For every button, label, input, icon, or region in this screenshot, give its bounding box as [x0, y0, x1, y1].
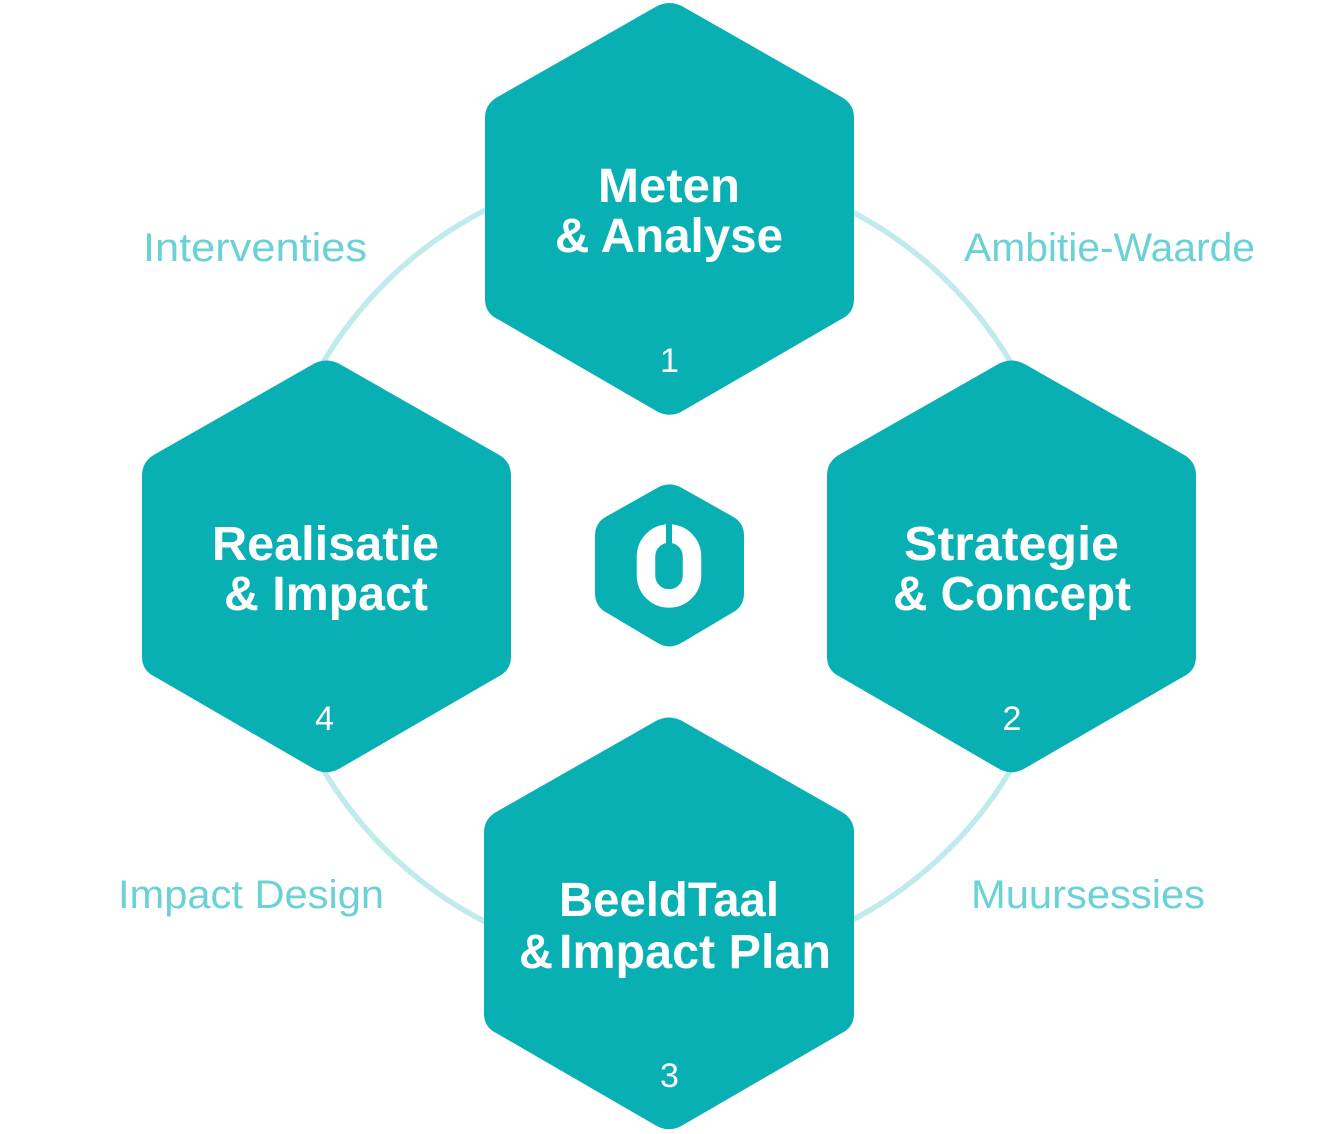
hexagon 3: BeeldTaal & Impact Plan: 3 — [660, 1057, 679, 1095]
hexagon 1: Meten & Analyse: & Analyse — [555, 210, 783, 263]
label: Interventies: Interventies — [143, 226, 367, 270]
hexagon 2: Strategie & Concept: 2 — [1003, 700, 1021, 738]
hexagon 4: Realisatie & Impact: & Impact — [224, 568, 428, 621]
hexagon 3: BeeldTaal & Impact Plan: & — [519, 926, 553, 979]
hexagon 3: BeeldTaal & Impact Plan — [484, 718, 854, 1129]
hexagon 2: Strategie & Concept — [827, 360, 1196, 772]
hexagon 1: Meten & Analyse: Meten — [598, 160, 740, 213]
hexagon 3: BeeldTaal & Impact Plan: BeeldTaal — [559, 874, 779, 927]
hexagon 3: BeeldTaal & Impact Plan: Impact Plan — [559, 926, 831, 979]
hexagon 2: Strategie & Concept: Strategie — [904, 518, 1119, 571]
hexagon 4: Realisatie & Impact — [142, 360, 511, 772]
hexagon 4: Realisatie & Impact: Realisatie — [212, 518, 439, 571]
hexagon 2: Strategie & Concept: & Concept — [893, 568, 1131, 621]
label: Muursessies: Muursessies — [971, 873, 1205, 917]
label: Impact Design: Impact Design — [118, 873, 384, 917]
hexagon 4: Realisatie & Impact: 4 — [315, 700, 334, 738]
connecting ring — [268, 166, 1066, 966]
hexagon 1: Meten & Analyse: 1 — [660, 342, 679, 380]
hexagon 1: Meten & Analyse — [485, 3, 854, 415]
centre logo hexagon — [595, 484, 744, 646]
label: Ambitie-Waarde: Ambitie-Waarde — [964, 226, 1255, 270]
